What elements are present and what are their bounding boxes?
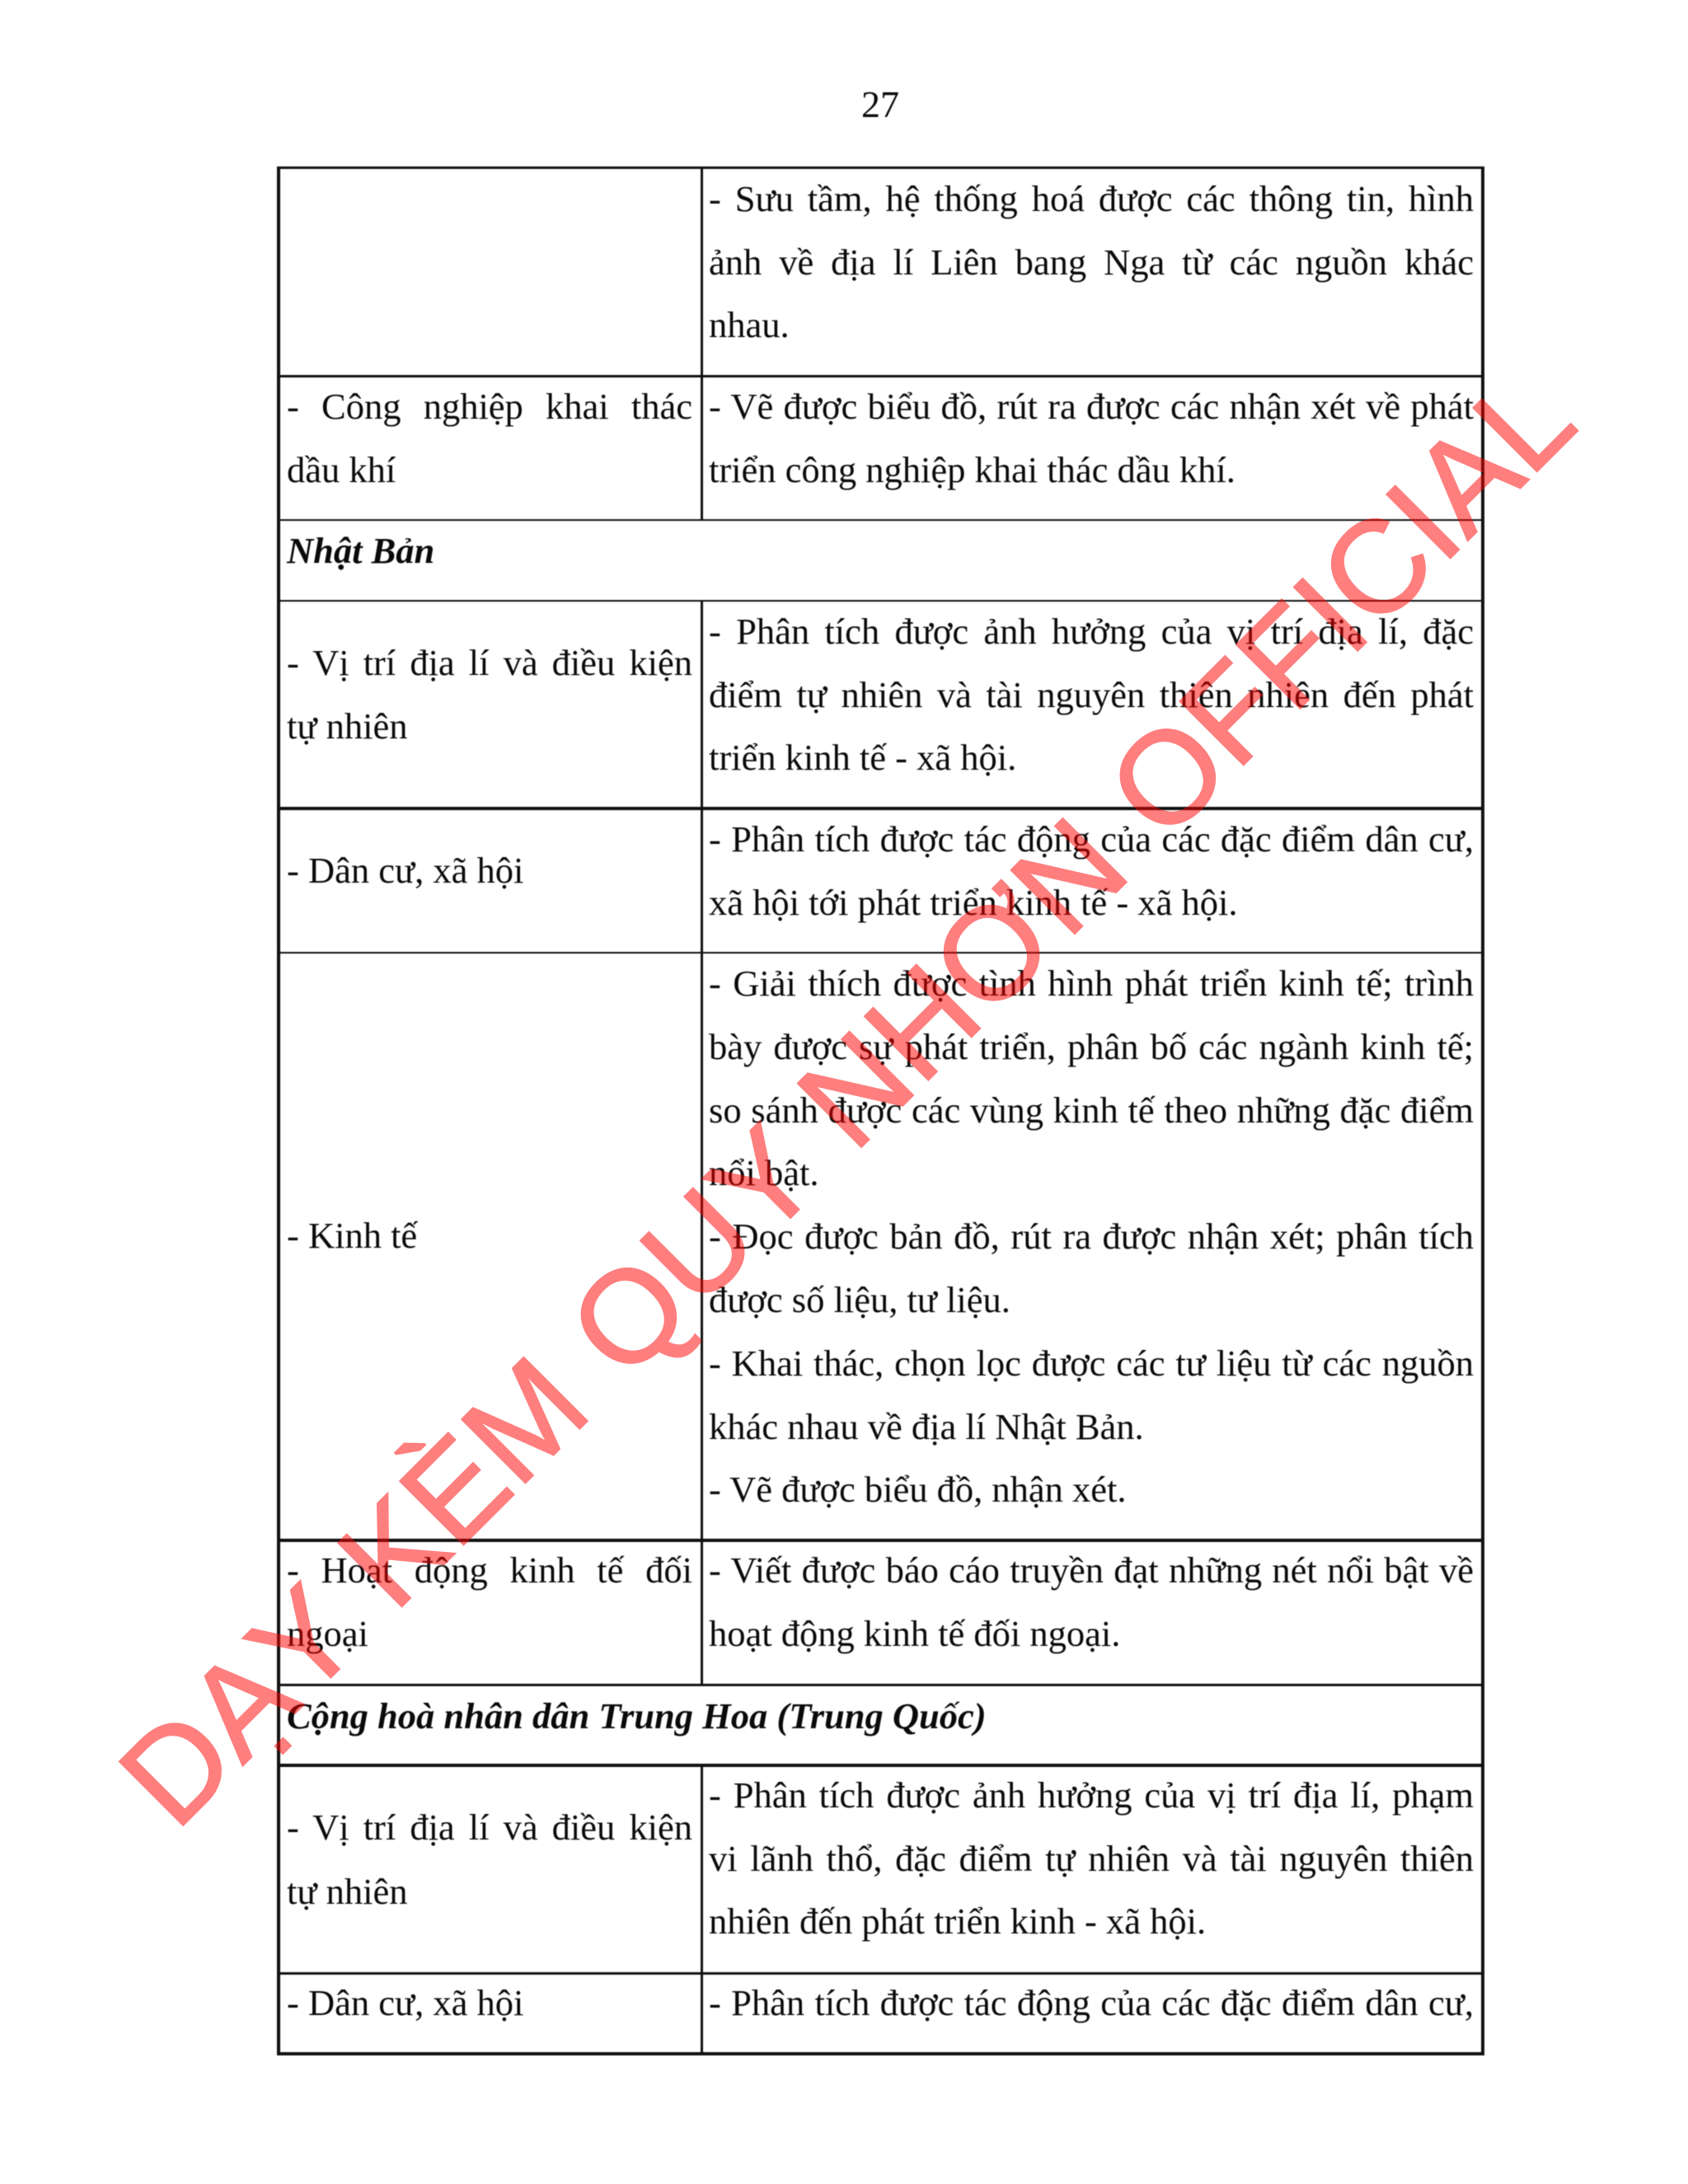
left cell: nội dung: - Kinh tế [287,1215,417,1256]
right cell: yêu cầu: khác nhau về địa lí Nhật Bản. [709,1406,1144,1447]
right cell: yêu cầu: nhiên đến phát triển kinh - xã hội. [709,1900,1206,1942]
right cell: kỹ năng sưu tầm: ảnh về địa lí Liên bang Nga từ các nguồn khác [709,241,1474,283]
right cell: yêu cầu: điểm tự nhiên và tài nguyên thiên nhiên đến phát [709,674,1474,715]
left cell: nội dung: - Vị trí địa lí và điều kiện [287,642,692,683]
right cell: yêu cầu [709,386,1474,491]
right cell: yêu cầu [708,963,1474,1510]
right cell: kỹ năng sưu tầm: - Sưu tầm, hệ thống hoá được các thông tin, hình [709,178,1474,219]
right cell: yêu cầu: nổi bật. [709,1152,818,1193]
table row: Nhật Bản, dân cư xã hội [287,818,1474,923]
left cell: nội dung: - Công nghiệp khai thác [287,386,692,427]
left cell: nội dung: tự nhiên [287,705,407,747]
watermark: DẠY KÈM QUY NHƠN OFFICIAL [91,344,1601,1853]
left cell: nội dung: - Hoạt động kinh tế đối [287,1549,692,1591]
right cell: yêu cầu [709,611,1474,778]
section heading: Cộng hoà nhân dân Trung Hoa: Cộng hoà nhân dân Trung Hoa (Trung Quốc) [287,1694,987,1736]
left cell: nội dung [287,1549,692,1655]
left cell: nội dung: - Vị trí địa lí và điều kiện [287,1807,692,1848]
right cell: yêu cầu: được số liệu, tư liệu. [709,1279,1010,1320]
right cell: yêu cầu: - Viết được báo cáo truyền đạt những nét nổi bật về [709,1549,1474,1591]
right cell: yêu cầu: - Phân tích được tác động của các đặc điểm dân cư, [709,1982,1474,2023]
left cell: nội dung: dầu khí [287,449,396,490]
left cell: nội dung: - Dân cư, xã hội [287,850,523,891]
right cell: yêu cầu: - Giải thích được tình hình phát triển kinh tế; trình [709,963,1474,1004]
right cell: yêu cầu: - Vẽ được biểu đồ, rút ra được các nhận xét về phát [709,386,1474,427]
right cell: yêu cầu: - Đọc được bản đồ, rút ra được nhận xét; phân tích [709,1216,1474,1257]
right cell: yêu cầu: - Vẽ được biểu đồ, nhận xét. [709,1469,1127,1510]
right cell: kỹ năng sưu tầm [709,178,1474,345]
section heading: Nhật Bản: Nhật Bản [287,529,434,570]
right cell: yêu cầu: hoạt động kinh tế đối ngoại. [709,1613,1120,1654]
table row: tư liệu về Liên bang Nga [709,178,1474,345]
table row: Trung Quốc, vị trí địa lí [287,1774,1474,1942]
left cell: nội dung: ngoại [287,1613,368,1654]
left cell: nội dung [287,1807,692,1912]
left cell: nội dung [287,642,692,747]
table row: Trung Quốc, dân cư xã hội [287,1982,1474,2024]
right cell: yêu cầu: - Phân tích được ảnh hưởng của vị trí địa lí, phạm [709,1774,1474,1816]
right cell: yêu cầu: vi lãnh thổ, đặc điểm tự nhiên và tài nguyên thiên [709,1838,1474,1879]
right cell: kỹ năng sưu tầm: nhau. [709,304,790,345]
right cell: yêu cầu [709,1549,1474,1655]
right cell: yêu cầu [709,818,1474,923]
right cell: yêu cầu [708,1774,1474,1942]
page number: 27 [861,83,899,125]
right cell: yêu cầu: triển công nghiệp khai thác dầu khí. [709,449,1236,490]
table row: công nghiệp khai thác dầu khí [287,386,1474,491]
left cell: nội dung: - Dân cư, xã hội [287,1982,523,2023]
right cell: yêu cầu: - Phân tích được ảnh hưởng của vị trí địa lí, đặc [709,611,1474,652]
right cell: yêu cầu: - Phân tích được tác động của các đặc điểm dân cư, [709,818,1474,860]
right cell: yêu cầu: xã hội tới phát triển kinh tế - xã hội. [709,882,1237,923]
right cell: yêu cầu: so sánh được các vùng kinh tế theo những đặc điểm [709,1090,1474,1131]
table row: Nhật Bản, kinh tế [287,963,1474,1510]
left cell: nội dung: tự nhiên [287,1871,407,1912]
right cell: yêu cầu: bày được sự phát triển, phân bố các ngành kinh tế; [709,1026,1474,1067]
right cell: yêu cầu: triển kinh tế - xã hội. [709,737,1016,778]
left cell: nội dung [287,386,692,490]
table grid lines [276,166,1485,2056]
table row: Nhật Bản, hoạt động kinh tế đối ngoại [287,1549,1474,1655]
right cell: yêu cầu: - Khai thác, chọn lọc được các tư liệu từ các nguồn [709,1343,1474,1384]
table row: Nhật Bản, vị trí địa lí [287,611,1474,778]
